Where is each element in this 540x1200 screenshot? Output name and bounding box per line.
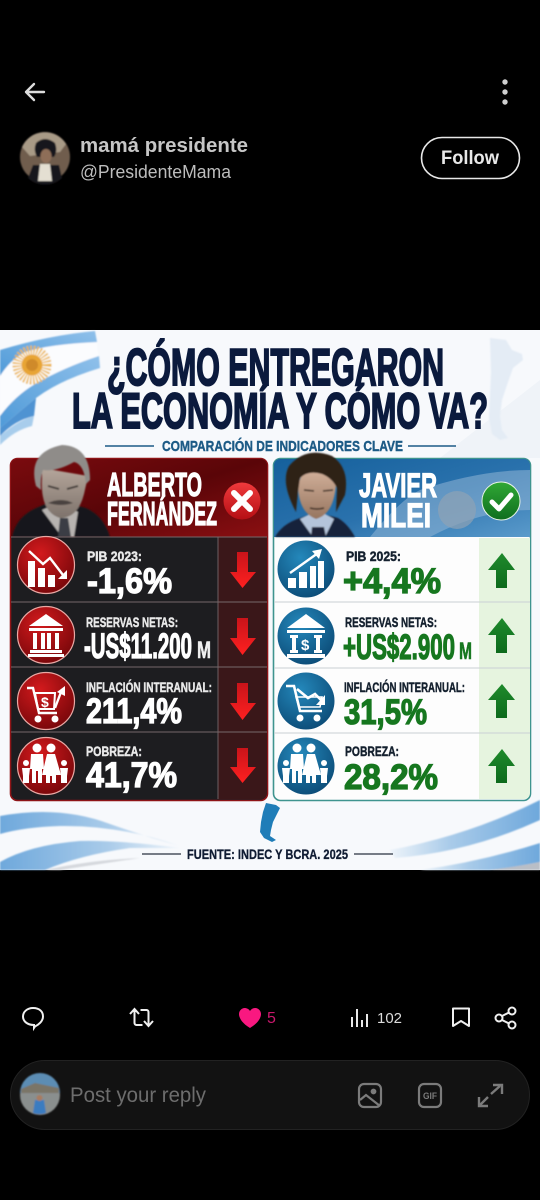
map: dotted Argentina	[489, 338, 523, 440]
label: RESERVAS NETAS:	[86, 615, 178, 630]
views count: 102	[377, 1010, 402, 1027]
background diagonal shade	[440, 380, 540, 458]
name: Alberto Fernández: ALBERTO	[107, 466, 202, 503]
value: 31,5%	[344, 693, 427, 732]
arrow up	[488, 684, 515, 718]
icon: back arrow	[26, 84, 44, 100]
label: PIB 2025:	[346, 549, 401, 564]
row dividers	[274, 602, 530, 733]
icon: sun of May	[17, 350, 47, 380]
icon: GIF: GIF	[423, 1091, 437, 1101]
row: reservas netas	[18, 606, 256, 666]
follow button	[422, 138, 520, 178]
icon: expand	[479, 1085, 502, 1106]
portrait: Alberto Fernández	[12, 445, 110, 537]
icon: family	[278, 738, 334, 794]
label: INFLACIÓN INTERANUAL:	[86, 680, 212, 695]
icon: bank with dollar: $	[301, 637, 310, 654]
icon: more menu	[502, 79, 508, 105]
arrow down	[230, 618, 256, 655]
row: pobreza	[278, 738, 515, 797]
subtitle: COMPARACIÓN DE INDICADORES CLAVE	[162, 437, 403, 455]
label: RESERVAS NETAS:	[345, 615, 437, 630]
row: reservas netas	[278, 608, 515, 667]
reply placeholder: Post your reply	[70, 1084, 206, 1107]
name: Alberto Fernández: FERNÁNDEZ	[107, 495, 217, 532]
infographic	[0, 330, 540, 870]
arrow down	[230, 552, 256, 588]
icon: rising bars	[278, 540, 334, 598]
panel: Alberto Fernández	[10, 445, 268, 800]
row: PIB 2023	[18, 536, 256, 601]
reply field	[10, 1060, 530, 1130]
follow button: Follow	[441, 148, 499, 169]
name: Alberto Fernández	[107, 466, 217, 532]
panel frame	[10, 458, 268, 800]
row: reservas netas: M	[459, 638, 472, 665]
label: POBREZA:	[345, 744, 399, 759]
icon: bank	[18, 606, 74, 664]
name: Javier Milei: MILEI	[361, 497, 431, 535]
icon: falling bars	[18, 536, 74, 594]
infographic background	[0, 330, 540, 870]
icon: family	[18, 738, 74, 794]
row: inflación	[18, 672, 256, 731]
icon: bank with dollar	[278, 608, 334, 664]
panel: Javier Milei	[274, 453, 530, 800]
icon: red cross badge	[224, 482, 260, 520]
icon: green check badge	[482, 482, 520, 520]
app top bar	[20, 79, 520, 185]
row: PIB 2025	[278, 540, 515, 601]
name: Javier Milei: JAVIER	[359, 467, 437, 505]
value: -US$11.200	[84, 627, 192, 666]
bottom flag ribbons	[0, 800, 540, 870]
map: Argentina small	[260, 803, 280, 842]
icon: reply	[23, 1008, 43, 1028]
portrait: Javier Milei	[275, 453, 355, 537]
panel frame	[274, 458, 530, 800]
label: POBREZA:	[86, 744, 142, 759]
source: FUENTE: INDEC Y BCRA. 2025	[187, 847, 348, 862]
header flag band	[370, 470, 530, 537]
value: 211,4%	[86, 692, 182, 731]
like count: 5	[267, 1010, 276, 1027]
author name: mamá presidente	[80, 135, 248, 157]
icon: image	[359, 1084, 381, 1107]
row: inflación	[278, 672, 515, 732]
icon: bookmark	[453, 1008, 469, 1026]
value: 28,2%	[344, 758, 438, 797]
value: +4,4%	[343, 562, 441, 601]
arrow up	[488, 618, 515, 653]
label: PIB 2023:	[87, 549, 142, 564]
icon: GIF	[419, 1084, 441, 1107]
row: pobreza	[18, 738, 256, 795]
sun emblem	[438, 491, 476, 529]
icon: cart with rising arrow: $	[41, 694, 49, 710]
arrow up	[488, 749, 515, 783]
icon: repost	[130, 1009, 153, 1026]
name: Javier Milei	[359, 467, 437, 535]
icon: cart with falling arrow	[278, 672, 334, 730]
row dividers	[11, 537, 267, 799]
row: reservas netas: M	[197, 637, 211, 664]
arrow up	[488, 553, 515, 588]
author handle: @PresidenteMama	[80, 162, 232, 182]
blue header	[274, 459, 530, 537]
label: INFLACIÓN INTERANUAL:	[344, 680, 465, 695]
arrow column shade	[479, 538, 530, 799]
title	[72, 339, 488, 439]
icon: cart with rising arrow	[18, 672, 74, 730]
icon: share	[496, 1008, 516, 1028]
reply bar	[10, 1060, 530, 1130]
action bar	[23, 1008, 516, 1028]
red header	[11, 459, 267, 537]
icon: views	[352, 1009, 367, 1027]
icon: heart	[239, 1008, 261, 1028]
value: 41,7%	[86, 756, 177, 795]
flag ribbon top left	[0, 331, 100, 445]
user avatar	[20, 1073, 60, 1115]
value: +US$2.900	[343, 628, 455, 667]
arrow column shade	[218, 537, 267, 799]
arrow down	[230, 683, 256, 720]
value: -1,6%	[87, 562, 172, 601]
arrow down	[230, 748, 256, 783]
profile avatar	[20, 132, 70, 185]
